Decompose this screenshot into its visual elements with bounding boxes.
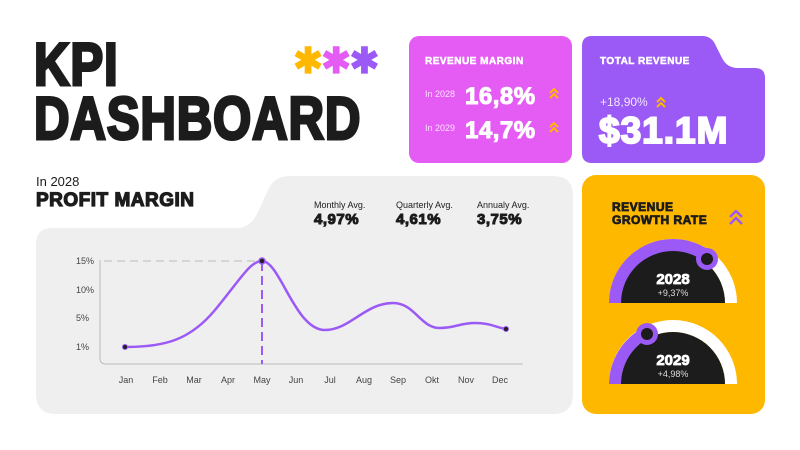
gauge 2029: 2029 (656, 352, 690, 369)
line chart: Jan (119, 375, 133, 385)
panel: revenue margin (409, 36, 572, 163)
icon: asterisks: ✱✱✱ (293, 40, 378, 81)
gauge 2028: +9,37% (658, 288, 688, 298)
gauge 2029: +4,98% (658, 369, 688, 379)
title (34, 31, 361, 152)
icon: chevrons (729, 210, 743, 225)
heading: profit margin: In 2028 (36, 174, 79, 189)
line chart: Jul (324, 375, 336, 385)
panel: chart (36, 176, 573, 414)
stats: 3,75% (477, 211, 522, 228)
line chart: May (253, 375, 271, 385)
panel: revenue growth rate (582, 175, 765, 414)
line chart: 10% (76, 285, 94, 295)
line chart: 1% (76, 342, 89, 352)
line chart: Jun (289, 375, 303, 385)
line chart: Mar (186, 375, 202, 385)
row 2028: In 2028 (425, 89, 455, 99)
row 2028 (425, 83, 559, 110)
gauge 2028: 2028 (656, 271, 690, 288)
gauge 2029 (609, 320, 737, 384)
row 2029 (425, 117, 559, 144)
line chart: Dec (492, 375, 508, 385)
line chart: 15% (76, 256, 94, 266)
stats (314, 200, 529, 228)
heading: REVENUE MARGIN (425, 56, 524, 67)
line chart: 5% (76, 313, 89, 323)
heading: GROWTH RATE (612, 213, 707, 227)
line chart: Sep (390, 375, 406, 385)
gauge 2028 (609, 239, 737, 303)
heading: REVENUE (612, 200, 674, 214)
stats: 4,97% (314, 211, 359, 228)
line chart: Okt (425, 375, 439, 385)
stats: 4,61% (396, 211, 441, 228)
row 2029: 14,7% (465, 117, 536, 144)
heading: TOTAL REVENUE (600, 56, 690, 67)
line chart: Aug (356, 375, 372, 385)
stats: Quarterly Avg. (396, 200, 453, 210)
row 2028: 16,8% (465, 83, 536, 110)
title: KPI (34, 31, 118, 98)
growth: +18,90% (600, 95, 648, 109)
heading: profit margin: PROFIT MARGIN (36, 190, 194, 211)
stats: Monthly Avg. (314, 200, 365, 210)
row 2029: In 2029 (425, 123, 455, 133)
line chart: Apr (221, 375, 235, 385)
panel: total revenue (582, 36, 765, 163)
line chart: Feb (152, 375, 168, 385)
heading (612, 200, 707, 227)
line chart: Nov (458, 375, 474, 385)
heading: profit margin (36, 174, 194, 211)
value: $31.1M (599, 110, 728, 151)
stats: Annualy Avg. (477, 200, 529, 210)
title: DASHBOARD (34, 85, 361, 152)
